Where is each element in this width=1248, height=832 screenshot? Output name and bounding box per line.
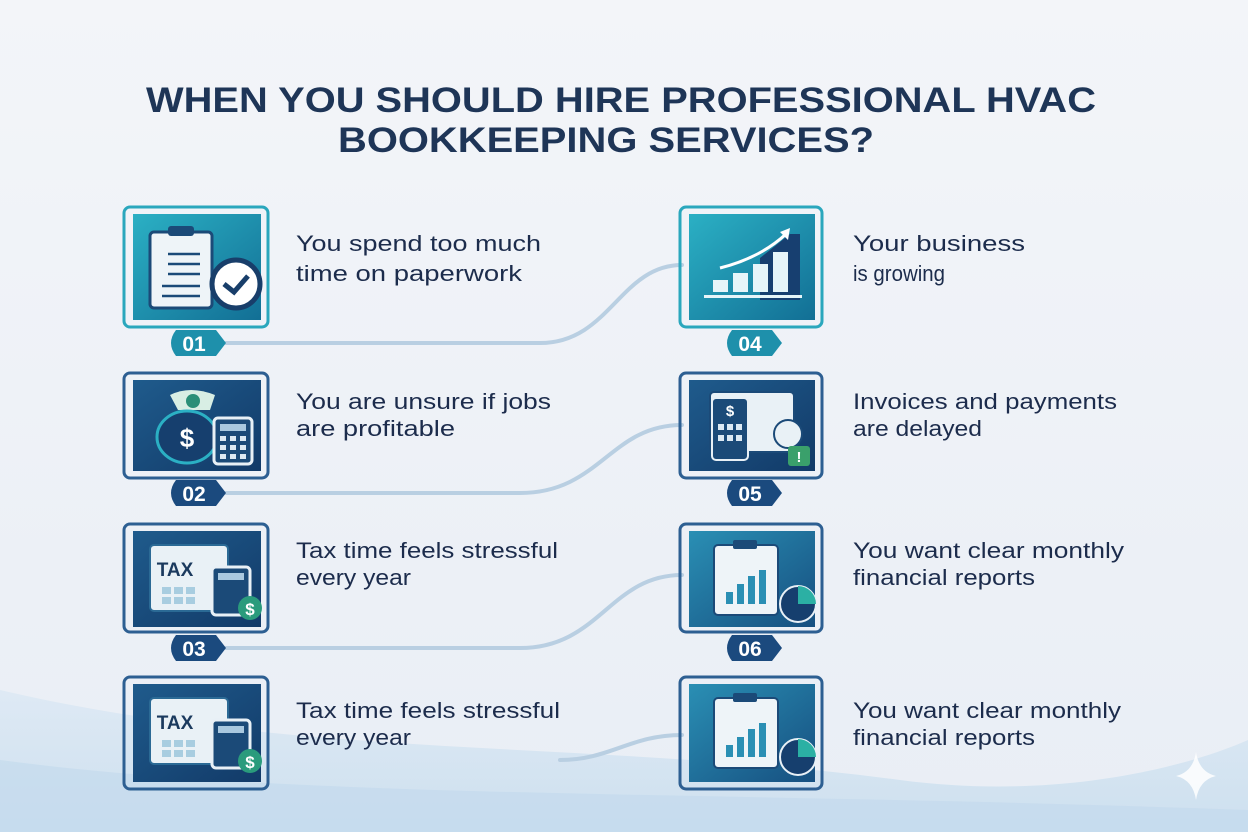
badge 02 bbox=[171, 480, 226, 506]
text 02: are profitable bbox=[296, 416, 455, 441]
text 08: You want clear monthly bbox=[853, 698, 1121, 723]
badge 06 bbox=[727, 635, 782, 661]
badge 03 bbox=[171, 635, 226, 661]
title: WHEN YOU SHOULD HIRE PROFESSIONAL HVAC bbox=[146, 81, 1096, 120]
card 07: tax repeat: $ bbox=[245, 753, 255, 772]
card 02: profitability: $ bbox=[180, 423, 195, 453]
text 08: financial reports bbox=[853, 725, 1035, 750]
badge 02: 02 bbox=[182, 483, 206, 506]
badge 05 bbox=[727, 480, 782, 506]
text 07: Tax time feels stressful bbox=[296, 698, 560, 723]
card 05: invoices: $ bbox=[726, 403, 735, 420]
text 06: You want clear monthly bbox=[853, 538, 1124, 563]
text 01: time on paperwork bbox=[296, 261, 523, 286]
text 03 bbox=[296, 538, 558, 590]
text 03: Tax time feels stressful bbox=[296, 538, 558, 563]
text 05: are delayed bbox=[853, 416, 982, 441]
card 08: reports repeat bbox=[680, 677, 822, 789]
text 03: every year bbox=[296, 565, 411, 590]
card 03: tax bbox=[124, 524, 268, 632]
badge 04: 04 bbox=[738, 333, 762, 356]
text 04: Your business bbox=[853, 231, 1025, 256]
text 07: every year bbox=[296, 725, 411, 750]
connector lines bbox=[226, 265, 682, 760]
card 07: tax repeat: TAX bbox=[157, 713, 194, 734]
card 01: paperwork bbox=[124, 207, 268, 327]
text 06: financial reports bbox=[853, 565, 1035, 590]
icon: sparkle bbox=[1176, 752, 1216, 800]
card 07: tax repeat bbox=[124, 677, 268, 789]
text 02 bbox=[296, 389, 551, 441]
card 06: reports bbox=[680, 524, 822, 632]
card 03: tax: TAX bbox=[157, 560, 194, 581]
badge 05: 05 bbox=[738, 483, 762, 506]
text 04 bbox=[853, 231, 1025, 286]
badge 03: 03 bbox=[182, 638, 206, 661]
card 02: profitability bbox=[124, 373, 268, 478]
card 03: tax: $ bbox=[245, 600, 255, 619]
text 02: You are unsure if jobs bbox=[296, 389, 551, 414]
badge 01 bbox=[171, 330, 226, 356]
badge 04 bbox=[727, 330, 782, 356]
card 05: invoices: ! bbox=[796, 449, 802, 466]
card 05: invoices bbox=[680, 373, 822, 478]
badge 01: 01 bbox=[182, 333, 206, 356]
text 05 bbox=[853, 389, 1117, 441]
text 08 bbox=[853, 698, 1121, 750]
text 06 bbox=[853, 538, 1124, 590]
title bbox=[146, 81, 1096, 160]
title: BOOKKEEPING SERVICES? bbox=[338, 121, 874, 160]
text 01 bbox=[296, 231, 541, 286]
text 05: Invoices and payments bbox=[853, 389, 1117, 414]
card 04: growing bbox=[680, 207, 822, 327]
badge 06: 06 bbox=[738, 638, 762, 661]
text 07 bbox=[296, 698, 560, 750]
text 04: is growing bbox=[853, 261, 945, 286]
text 01: You spend too much bbox=[296, 231, 541, 256]
